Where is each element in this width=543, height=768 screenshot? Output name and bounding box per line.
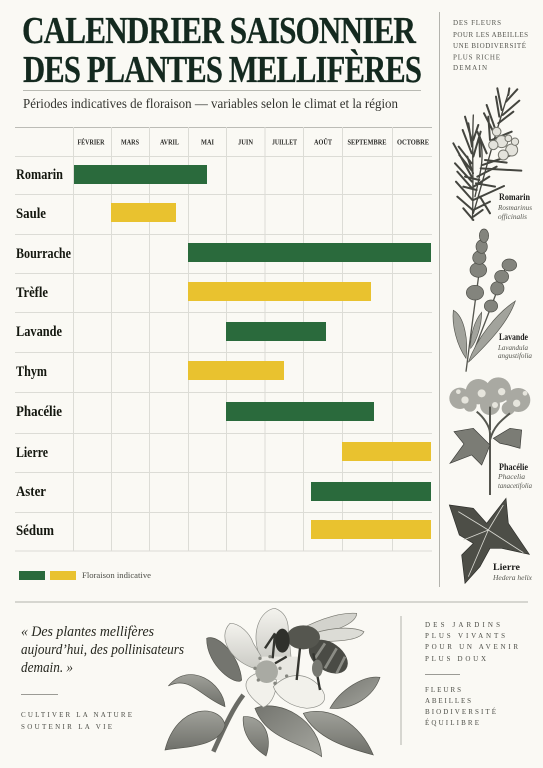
label: Phacélie bbox=[497, 462, 532, 490]
right text: keywords: ÉQUILIBRE bbox=[425, 719, 479, 727]
right text: garden slogan: PLUS DOUX bbox=[425, 655, 486, 663]
label: Lierre: Hedera helix bbox=[492, 573, 533, 582]
label: Lavande: Lavandula bbox=[497, 343, 528, 352]
row: Aster: Aster bbox=[16, 484, 46, 500]
quote: demain. » bbox=[21, 660, 73, 676]
illustration: flower and bee bbox=[165, 608, 380, 757]
row: Lierre bbox=[16, 442, 431, 461]
right text: keywords: ABEILLES bbox=[425, 697, 471, 705]
label: Phacélie: Phacélie bbox=[499, 462, 528, 472]
row: Saule: Saule bbox=[16, 206, 46, 222]
tagline: SOUTENIR LA VIE bbox=[21, 723, 112, 731]
stem bbox=[213, 695, 243, 752]
label: Romarin: officinalis bbox=[498, 212, 527, 221]
quote: « Des plantes mellifères bbox=[21, 624, 154, 640]
side text bbox=[453, 19, 528, 72]
row: Aster bbox=[16, 482, 431, 501]
legend: Floraison indicative bbox=[82, 571, 151, 580]
quote: aujourd’hui, des pollinisateurs bbox=[21, 642, 184, 658]
tagline bbox=[21, 711, 132, 731]
month headers: JUIN bbox=[238, 138, 254, 146]
subtitle: Périodes indicatives de floraison — variables selon le climat et la région bbox=[23, 96, 398, 111]
title: CALENDRIER SAISONNIER bbox=[22, 10, 417, 52]
stamens bbox=[253, 655, 288, 685]
row: Lavande: Lavande bbox=[16, 324, 62, 340]
side text: PLUS RICHE bbox=[453, 54, 500, 62]
side text: DES FLEURS bbox=[453, 19, 501, 27]
illustration: lavender bbox=[453, 229, 517, 372]
month headers: SEPTEMBRE bbox=[348, 138, 387, 146]
label: Lavande bbox=[497, 332, 532, 360]
side text: POUR LES ABEILLES bbox=[453, 31, 528, 39]
row: Bourrache: Bourrache bbox=[16, 246, 71, 262]
label: Romarin: Rosmarinus bbox=[497, 203, 532, 212]
month headers: AVRIL bbox=[160, 138, 179, 146]
side text: UNE BIODIVERSITÉ bbox=[453, 42, 526, 50]
label: Lavande: Lavande bbox=[499, 332, 528, 342]
petals bbox=[225, 608, 325, 708]
illustration: phacelia bbox=[449, 377, 530, 495]
row: Thym: Thym bbox=[16, 364, 47, 380]
row: Phacélie bbox=[16, 402, 374, 421]
tagline: CULTIVER LA NATURE bbox=[21, 711, 132, 719]
month headers: MARS bbox=[121, 138, 139, 146]
legend bbox=[19, 571, 151, 580]
row: Bourrache bbox=[16, 243, 431, 262]
illustration: rosemary bbox=[453, 88, 521, 220]
label: Lierre bbox=[492, 562, 533, 582]
right text: keywords: BIODIVERSITÉ bbox=[425, 708, 496, 716]
right text: garden slogan: POUR UN AVENIR bbox=[425, 643, 518, 651]
row: Lavande bbox=[16, 322, 326, 341]
bee bbox=[265, 613, 364, 690]
calendar chart bbox=[15, 127, 432, 551]
row: Romarin: Romarin bbox=[16, 167, 63, 183]
title bbox=[22, 10, 421, 91]
row: Trèfle bbox=[16, 282, 371, 301]
row: Sédum bbox=[16, 520, 431, 539]
month headers: OCTOBRE bbox=[397, 138, 429, 146]
row: Thym bbox=[16, 361, 284, 380]
row: Saule bbox=[16, 203, 176, 222]
month headers: FÉVRIER bbox=[78, 136, 105, 146]
title: DES PLANTES MELLIFÈRES bbox=[23, 49, 421, 91]
label: Romarin bbox=[497, 192, 532, 221]
right text: keywords bbox=[425, 686, 496, 727]
label: Lierre: Lierre bbox=[493, 562, 520, 572]
month headers: JUILLET bbox=[272, 138, 297, 146]
row: Phacélie: Phacélie bbox=[16, 404, 62, 420]
right text: garden slogan: PLUS VIVANTS bbox=[425, 632, 505, 640]
illustration: ivy leaf bbox=[449, 498, 529, 583]
row: Lierre: Lierre bbox=[16, 445, 48, 461]
right text: keywords: FLEURS bbox=[425, 686, 461, 694]
side text: DEMAIN bbox=[453, 64, 487, 72]
month headers: AOÛT bbox=[314, 136, 332, 146]
calendar grid bbox=[15, 127, 432, 551]
label: Phacélie: tanacetifolia bbox=[498, 481, 532, 490]
row: Trèfle: Trèfle bbox=[16, 285, 48, 301]
quote bbox=[21, 624, 184, 676]
row: Romarin bbox=[16, 165, 207, 184]
label: Phacélie: Phacelia bbox=[497, 472, 525, 481]
month headers bbox=[78, 136, 429, 146]
right text: garden slogan bbox=[425, 621, 518, 663]
right text: garden slogan: DES JARDINS bbox=[425, 621, 500, 629]
row: Sédum: Sédum bbox=[16, 523, 54, 539]
label: Romarin: Romarin bbox=[499, 192, 530, 202]
label: Lavande: angustifolia bbox=[498, 351, 532, 360]
month headers: MAI bbox=[201, 138, 214, 146]
leaves bbox=[165, 638, 380, 757]
